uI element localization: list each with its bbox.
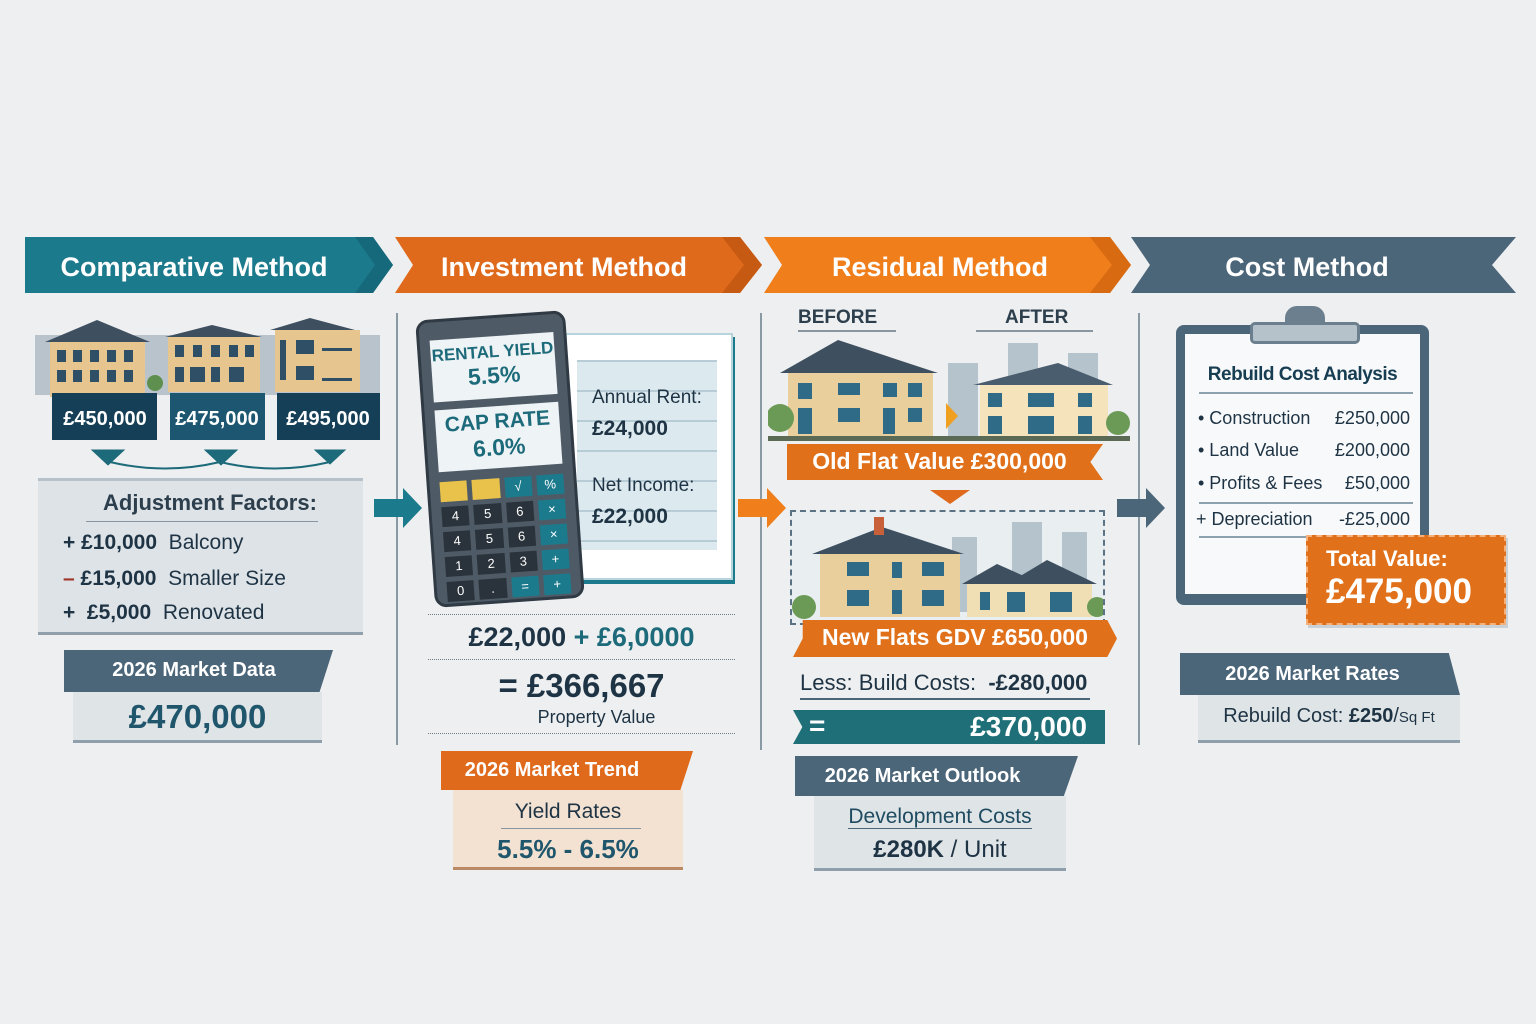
icon: calculator: 6.0% — [472, 432, 526, 462]
arrow 2 — [738, 488, 786, 528]
banner: 2026 market trend: 5.5% - 6.5% — [497, 834, 639, 864]
icon: clipboard: £250,000 — [1335, 408, 1410, 428]
panel: adjustment factors: + £10,000 Balcony — [63, 531, 243, 554]
panel: adjustment factors — [38, 478, 363, 635]
banner: 2026 market outlook: £280K / Unit — [873, 836, 1007, 863]
icon: clipboard: + Depreciation — [1196, 509, 1313, 529]
header: investment — [395, 237, 762, 293]
icon: clipboard: -£25,000 — [1339, 509, 1410, 529]
spreadsheet: Annual Rent: — [592, 387, 702, 408]
residual: before/after: BEFORE — [798, 307, 877, 328]
banner: 2026 market trend: 2026 Market Trend — [465, 759, 639, 781]
banner: 2026 market rates: 2026 Market Rates — [1225, 663, 1400, 685]
text: build costs: Less: Build Costs: -£280,000 — [800, 670, 1087, 695]
callout: total value: £475,000 — [1326, 572, 1472, 611]
icon: calculator: 5 — [484, 506, 492, 521]
icon: clipboard: • Construction — [1198, 408, 1310, 428]
price tags: £495,000 — [286, 408, 370, 430]
converging arrows — [92, 450, 345, 468]
icon: calculator: . — [491, 581, 495, 596]
icon: calculator: + — [553, 576, 562, 592]
banner: 2026 market trend — [441, 751, 693, 870]
panel: adjustment factors: + £5,000 Renovated — [63, 601, 264, 624]
icon: calculator: √ — [514, 479, 522, 494]
result bar: residual: £370,000 — [970, 711, 1087, 742]
icon: clipboard — [1176, 325, 1429, 605]
icon: calculator: 0 — [457, 583, 465, 598]
header: comparative — [25, 237, 393, 293]
spreadsheet: £24,000 — [592, 417, 668, 440]
price tags: £450,000 — [63, 408, 147, 430]
price tags — [52, 393, 380, 440]
icon: calculator: = — [521, 578, 529, 594]
banner: 2026 market data: 2026 Market Data — [112, 659, 276, 681]
price tags: £475,000 — [175, 408, 259, 430]
panel: adjustment factors: Adjustment Factors: — [103, 490, 317, 515]
icon: clipboard: Rebuild Cost Analysis — [1208, 364, 1397, 385]
banner: old flat value: Old Flat Value £300,000 — [812, 448, 1067, 474]
banner: 2026 market rates — [1180, 653, 1460, 743]
header: cost — [1131, 237, 1516, 293]
panel: adjustment factors: – £15,000 Smaller Size — [63, 567, 286, 590]
banner: 2026 market outlook: 2026 Market Outlook — [825, 765, 1020, 787]
arrow 3 — [1117, 488, 1165, 528]
result bar: residual: = — [809, 710, 825, 741]
icon: calculator: 3 — [519, 553, 527, 569]
icon: calculator: × — [549, 526, 558, 542]
icon: clipboard: • Profits & Fees — [1198, 473, 1322, 493]
clip — [1250, 306, 1360, 344]
banner: new flats gdv — [793, 620, 1117, 657]
text: AFTER — [1005, 307, 1068, 328]
icon: calculator: CAP RATE — [444, 406, 551, 437]
formula: investment: Property Value — [538, 707, 655, 727]
banner: old flat value — [787, 444, 1103, 480]
icon: calculator: 5.5% — [467, 360, 521, 390]
illustration: before/after houses — [766, 331, 1130, 441]
formula: investment: = £366,667 — [498, 667, 665, 704]
icon: calculator: 4 — [451, 508, 460, 523]
houses: comparative — [35, 318, 380, 397]
icon: clipboard: £50,000 — [1345, 473, 1410, 493]
spreadsheet — [565, 333, 733, 580]
icon: calculator: 1 — [455, 558, 463, 573]
banner: 2026 market data — [64, 650, 333, 743]
icon: calculator: 5 — [485, 531, 494, 546]
icon: calculator: × — [548, 501, 556, 517]
arrow 1 — [374, 488, 422, 528]
banner: 2026 market rates: Rebuild Cost: £250/Sq Ft — [1223, 705, 1435, 727]
icon: calculator: + — [551, 551, 560, 567]
icon: calculator: 2 — [487, 556, 495, 571]
banner: 2026 market outlook — [795, 756, 1078, 871]
spreadsheet: Net Income: — [592, 475, 694, 496]
formula: investment: £22,000 + £6,0000 — [468, 622, 694, 652]
header: investment: Investment Method — [441, 252, 687, 282]
spreadsheet: £22,000 — [592, 505, 668, 528]
triangle connector — [930, 490, 970, 504]
icon: calculator: % — [544, 476, 557, 492]
icon: clipboard: • Land Value — [1198, 440, 1299, 460]
icon: calculator — [415, 310, 585, 608]
dashed box: new flats — [790, 510, 1105, 625]
header: cost: Cost Method — [1225, 252, 1389, 282]
icon: calculator: 6 — [516, 504, 524, 519]
icon: calculator: RENTAL YIELD — [431, 338, 554, 365]
banner: 2026 market trend: Yield Rates — [515, 800, 621, 823]
header: residual — [764, 237, 1131, 293]
callout: total value: Total Value: — [1326, 546, 1448, 571]
callout: total value — [1306, 535, 1506, 625]
header: comparative: Comparative Method — [60, 252, 328, 282]
icon: calculator: 4 — [453, 533, 461, 548]
banner: 2026 market data: £470,000 — [129, 698, 266, 735]
formula: investment — [428, 614, 735, 734]
banner: new flats gdv: New Flats GDV £650,000 — [822, 624, 1088, 650]
icon: clipboard: £200,000 — [1335, 440, 1410, 460]
banner: 2026 market outlook: Development Costs — [848, 805, 1032, 828]
result bar: residual — [793, 710, 1105, 744]
icon: calculator: 6 — [517, 528, 526, 544]
header: residual: Residual Method — [832, 252, 1048, 282]
